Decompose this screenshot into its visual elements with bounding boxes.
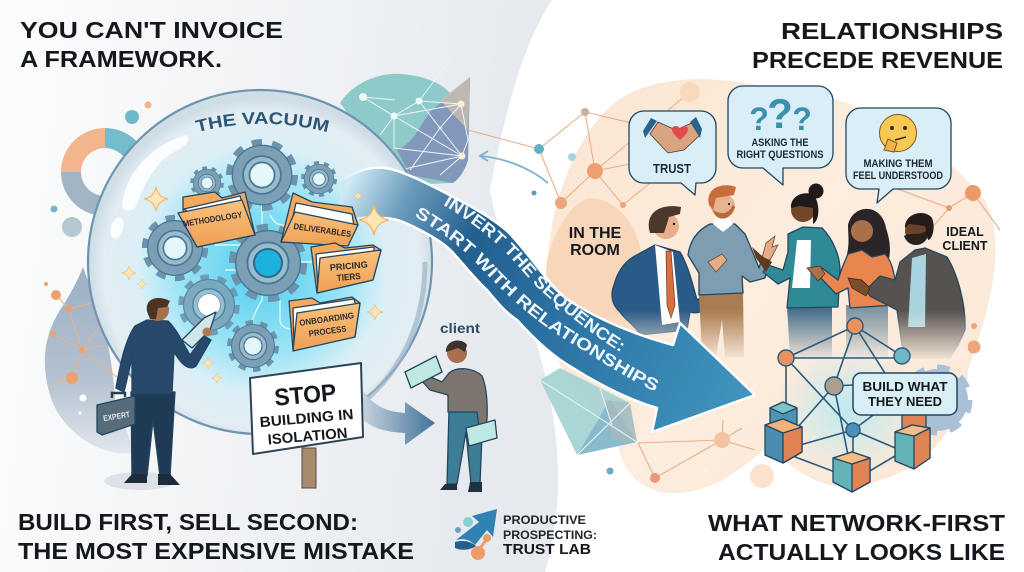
nodes	[778, 318, 910, 437]
speech bubble: making them feel understood: FEEL UNDERSTOOD	[853, 170, 943, 182]
circuit lines	[215, 140, 320, 345]
sparkles left	[122, 187, 383, 383]
shadow under expert	[104, 472, 176, 490]
folder: onboarding process	[289, 297, 360, 351]
label: in the room: IN THE	[569, 225, 622, 242]
icon: question marks	[749, 90, 812, 137]
fade over lower bodies	[608, 310, 968, 362]
icon: question marks: ?	[749, 101, 769, 137]
title: top right: PRECEDE REVENUE	[752, 47, 1003, 73]
figure: expert with briefcase	[97, 298, 216, 485]
title: bottom left: BUILD FIRST, SELL SECOND:	[18, 509, 358, 535]
main arrow: invert the sequence	[340, 166, 756, 434]
logo: productive prospecting trust lab	[455, 509, 597, 560]
title: bottom right: ACTUALLY LOOKS LIKE	[718, 539, 1005, 565]
figure: consultant in blue suit	[612, 206, 746, 335]
title: bottom right	[708, 510, 1005, 565]
folder: methodology: METHODOLOGY	[182, 209, 243, 229]
logo: productive prospecting trust lab: PROSPECTING:	[503, 530, 597, 542]
icon: question marks: ?	[792, 101, 812, 137]
figure: client holding cheques	[405, 320, 497, 492]
folder: deliverables	[281, 193, 358, 246]
sign: stop building in isolation: ISOLATION	[267, 426, 348, 448]
background: peach blob	[545, 79, 996, 493]
label: ideal client	[942, 225, 988, 253]
figure: client holding cheques: client	[440, 320, 480, 336]
folder: pricing tiers	[311, 243, 381, 293]
icon: thinking face	[880, 114, 916, 152]
label box	[853, 373, 957, 415]
label: ideal client: CLIENT	[942, 239, 988, 253]
arrow text line 2: START WITH RELATIONSHIPS	[416, 208, 658, 390]
gears cluster	[147, 140, 334, 368]
title: top left: A FRAMEWORK.	[20, 46, 222, 72]
figure: woman in teal blazer	[752, 184, 840, 358]
cheque	[405, 356, 442, 388]
figure: man in gray sweater	[688, 185, 778, 357]
decorative: donut chart	[50, 102, 152, 237]
speech bubble: trust: TRUST	[653, 161, 691, 176]
title: bottom right: WHAT NETWORK-FIRST	[708, 510, 1005, 536]
logo icon	[455, 509, 497, 560]
speech bubble: asking the right questions: RIGHT QUESTIONS	[736, 149, 824, 161]
folder: deliverables: DELIVERABLES	[293, 221, 352, 239]
label: in the room	[569, 225, 622, 259]
title: bottom left	[18, 509, 414, 564]
figure: woman in orange top	[807, 209, 896, 358]
icon: question marks: ?	[767, 90, 793, 137]
folder: onboarding process: PROCESS	[308, 323, 347, 339]
logo: productive prospecting trust lab: PRODUCTIVE	[503, 515, 586, 527]
small arrow to client	[363, 391, 435, 445]
arrow text line 1: INVERT THE SEQUENCE:	[444, 196, 624, 352]
folder: onboarding process: ONBOARDING	[299, 310, 355, 328]
decorative: teal network patch behind bubble	[340, 60, 470, 185]
label: in the room: ROOM	[570, 242, 620, 259]
logo: productive prospecting trust lab: TRUST LAB	[503, 541, 591, 558]
decorative: teal polygon	[540, 368, 637, 455]
icon: handshake	[643, 117, 702, 153]
figure: man in gray blazer	[848, 213, 965, 358]
cheque	[466, 420, 497, 446]
heading: the vacuum: THE VACUUM	[194, 112, 330, 132]
briefcase	[97, 393, 135, 435]
folder: methodology	[178, 192, 255, 247]
bubble highlight	[122, 135, 188, 211]
sign: stop building in isolation: STOP	[273, 379, 337, 412]
speech bubble: making them feel understood: MAKING THEM	[864, 158, 932, 170]
title: top right: RELATIONSHIPS	[781, 18, 1003, 44]
title: top left	[20, 17, 283, 72]
title: top left: YOU CAN'T INVOICE	[20, 17, 283, 43]
gear behind network	[906, 369, 968, 431]
thin blue arrow toward bubble	[480, 151, 548, 183]
title: bottom left: THE MOST EXPENSIVE MISTAKE	[18, 538, 414, 564]
title: top right	[752, 18, 1003, 73]
speech bubble: trust	[629, 111, 716, 195]
background: left panel	[0, 0, 558, 572]
speech bubble: making them feel understood	[846, 108, 951, 203]
background: darker peach patch	[546, 198, 642, 345]
sign: stop building in isolation: BUILDING IN	[259, 407, 354, 431]
sparkles over arrow	[354, 192, 389, 235]
blocks	[765, 402, 930, 492]
decorative: gray-blue network lobe left	[44, 267, 135, 454]
panel: the vacuum bubble	[86, 88, 434, 435]
label: ideal client: IDEAL	[946, 225, 984, 239]
briefcase: EXPERT	[103, 410, 131, 423]
sign: stop building in isolation	[250, 363, 363, 488]
network: build what they need	[765, 318, 968, 492]
decorative: right network lines	[468, 82, 1000, 488]
bubble inner rim	[325, 262, 425, 425]
folder: pricing tiers: TIERS	[336, 271, 361, 283]
bubble small highlight	[108, 216, 126, 240]
folder: pricing tiers: PRICING	[329, 259, 368, 273]
label box: BUILD WHAT	[862, 379, 948, 394]
speech bubble: asking the right questions	[728, 86, 833, 185]
speech bubble: asking the right questions: ASKING THE	[752, 137, 808, 149]
label box: THEY NEED	[868, 394, 942, 409]
